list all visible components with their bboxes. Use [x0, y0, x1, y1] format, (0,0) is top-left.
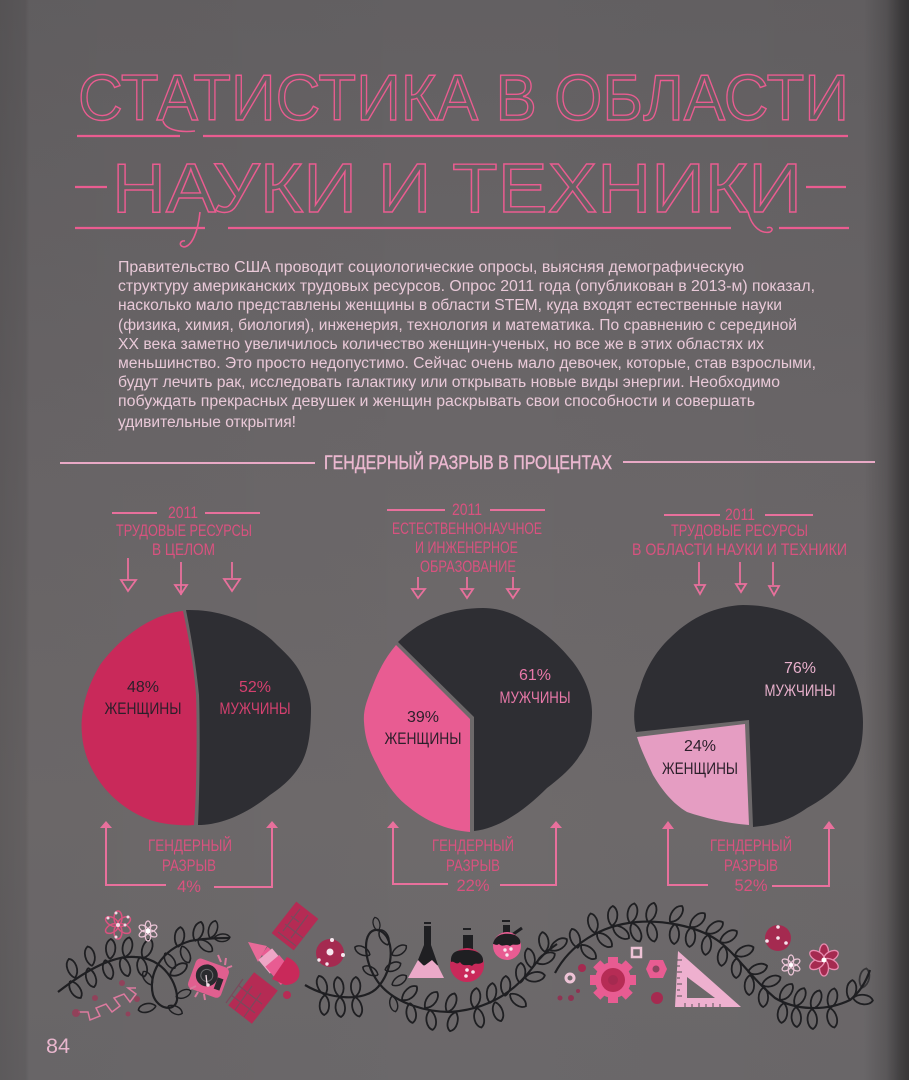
arrows down [695, 562, 779, 595]
slice: men 52% [186, 610, 311, 825]
intro paragraph: меньшинство. Это просто недопустимо. Сейчас очень мало девочек, которые, став взрослыми, [118, 355, 816, 372]
icon: flask round [450, 928, 484, 982]
label: women: 39% [407, 709, 439, 726]
gender gap 3 [662, 821, 835, 895]
gender gap 1: 4% [177, 878, 201, 896]
label: men [764, 660, 836, 700]
label: men: МУЖЧИНЫ [500, 688, 570, 707]
slice: women 48% [82, 611, 197, 825]
title rules and swashes [75, 121, 849, 247]
gender gap 2 [387, 821, 562, 895]
intro paragraph: Правительство США проводит социологические опросы, выясняя демографическую [118, 259, 744, 276]
column 3 header: ТРУДОВЫЕ РЕСУРСЫ [671, 522, 808, 540]
label: men: 76% [784, 660, 816, 677]
pie chart 2 [364, 608, 592, 832]
label: women: 48% [127, 679, 159, 696]
column 3 header [632, 506, 847, 595]
column 2 header: 2011 [452, 501, 482, 519]
label: men: 52% [239, 679, 271, 696]
intro paragraph: насколько мало представлены женщины в области STEM, куда входят естественные науки [118, 297, 782, 314]
column 1 header: 2011 [168, 504, 198, 522]
icon: circuit [72, 980, 140, 1020]
bracket arrows [100, 821, 278, 887]
gender gap 3: ГЕНДЕРНЫЙ [710, 836, 792, 855]
icon: record player [187, 955, 232, 1000]
gender gap 1 [100, 821, 278, 896]
column 3 header: 2011 [725, 506, 755, 524]
intro paragraph: удивительные открытия! [118, 414, 296, 431]
label: women [104, 679, 182, 718]
icon: atom cluster middle [316, 938, 345, 967]
title [75, 61, 849, 247]
label: men [220, 679, 290, 718]
icon: flowers right [765, 925, 840, 976]
label: women: ЖЕНЩИНЫ [104, 699, 182, 718]
column 1 header [112, 504, 260, 595]
intro paragraph: структуру американских трудовых ресурсов. Опрос 2011 года (опубликован в 2013-м) показал, [118, 278, 815, 295]
label: women: 24% [684, 738, 716, 755]
gender gap 2: 22% [456, 877, 490, 895]
label: men [500, 667, 570, 707]
column 1 header: ТРУДОВЫЕ РЕСУРСЫ [116, 522, 252, 540]
decorative branch left [58, 920, 230, 1017]
label: women [662, 738, 738, 778]
intro paragraph: XX века заметно увеличилось количество женщин-ученых, но все же в этих областях их [118, 336, 764, 353]
column 2 header: И ИНЖЕНЕРНОЕ [415, 539, 518, 557]
gender gap 1: РАЗРЫВ [162, 857, 216, 875]
title line 2: НАУКИ И ТЕХНИКИ [112, 149, 802, 227]
gender gap 3: 52% [734, 877, 768, 895]
page number: 84 [46, 1035, 70, 1058]
bracket arrows [662, 821, 835, 886]
icon: set square [675, 951, 741, 1007]
column 2 header: ОБРАЗОВАНИЕ [420, 558, 516, 576]
column 3 header: В ОБЛАСТИ НАУКИ И ТЕХНИКИ [632, 541, 847, 559]
slice: women 39% [364, 645, 470, 832]
pie chart 3 [634, 605, 863, 827]
gender gap 2: ГЕНДЕРНЫЙ [432, 836, 514, 855]
icon: nuts and bolts [558, 948, 667, 1004]
slice: men 61% [398, 608, 592, 831]
arrows down [121, 558, 240, 595]
icon: flowers left [104, 911, 158, 941]
pie chart 1 [82, 610, 311, 825]
column 1 header: В ЦЕЛОМ [152, 541, 215, 559]
icon: satellite [226, 902, 318, 1024]
slice: men 76% [634, 605, 863, 827]
label: women [384, 709, 462, 748]
decorative branch right [555, 901, 874, 1029]
arrows down [412, 577, 519, 598]
intro paragraph: (физика, химия, биология), инженерия, технология и математика. По сравнению с серединой [118, 317, 797, 334]
label: men: МУЖЧИНЫ [220, 699, 290, 718]
column 2 header [387, 501, 545, 598]
gender gap 2: РАЗРЫВ [446, 857, 500, 875]
label: men: 61% [519, 667, 551, 684]
bracket arrows [387, 821, 562, 885]
slice: women 24% [637, 724, 749, 825]
title line 1: СТАТИСТИКА В ОБЛАСТИ [78, 61, 849, 134]
gender gap 1: ГЕНДЕРНЫЙ [148, 836, 232, 855]
decorative branch middle [305, 917, 570, 1033]
intro paragraph [118, 259, 816, 431]
label: men: МУЖЧИНЫ [764, 681, 836, 700]
column 2 header: ЕСТЕСТВЕННОНАУЧНОЕ [392, 520, 542, 538]
icon: gear [590, 957, 636, 1003]
label: women: ЖЕНЩИНЫ [384, 729, 462, 748]
icon: flask triangular [408, 922, 444, 978]
gender gap 3: РАЗРЫВ [724, 857, 778, 875]
section heading: ГЕНДЕРНЫЙ РАЗРЫВ В ПРОЦЕНТАХ [324, 452, 612, 474]
label: women: ЖЕНЩИНЫ [662, 759, 738, 778]
intro paragraph: будут лечить рак, исследовать галактику или открывать новые виды энергии. Необходимо [118, 374, 780, 391]
intro paragraph: побуждать прекрасных девушек и женщин раскрывать свои способности и совершать [118, 393, 755, 410]
icon: flask tilted [493, 920, 522, 960]
